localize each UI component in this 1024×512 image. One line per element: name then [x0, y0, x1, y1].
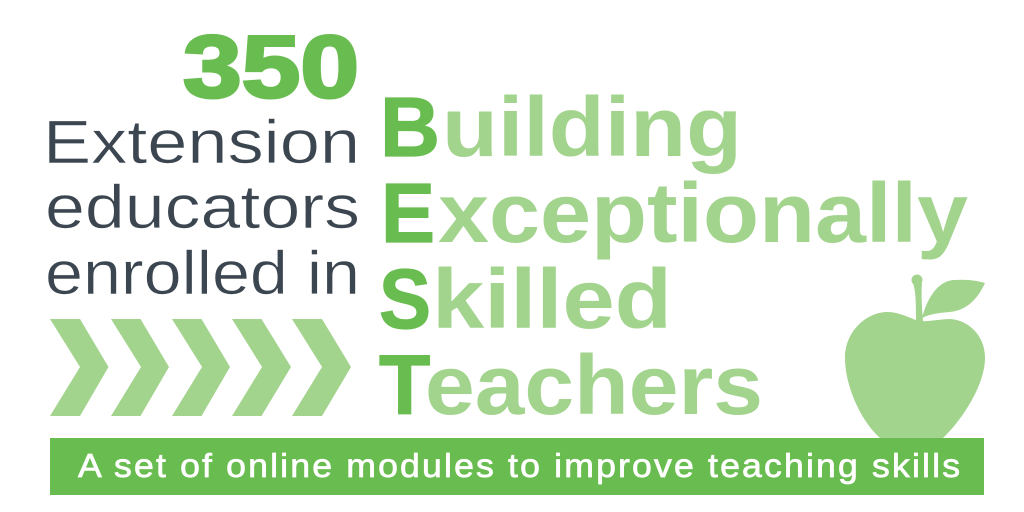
heading: Building Exceptionally Skilled Teachers	[379, 80, 968, 432]
banner text: A set of online modules to improve teaching skills	[78, 448, 960, 485]
line: Exceptionally: xceptionally	[438, 166, 968, 260]
line: Building: uilding	[442, 80, 742, 174]
chevron arrows	[50, 319, 351, 416]
icon: apple	[845, 274, 985, 438]
text: Extension educators enrolled in: educators	[45, 173, 360, 241]
text: Extension educators enrolled in: enrolled in	[45, 239, 360, 307]
number: 350: 350	[183, 17, 359, 116]
text: Extension educators enrolled in	[43, 108, 360, 307]
line: Exceptionally: E	[381, 166, 435, 260]
banner	[50, 438, 984, 495]
line: Skilled: killed	[432, 252, 672, 346]
line: Skilled: S	[379, 252, 431, 346]
line: Building: B	[380, 80, 440, 174]
line: Teachers: eachers	[425, 338, 763, 432]
line: Teachers: T	[379, 338, 430, 432]
text: Extension educators enrolled in: Extension	[43, 108, 360, 176]
